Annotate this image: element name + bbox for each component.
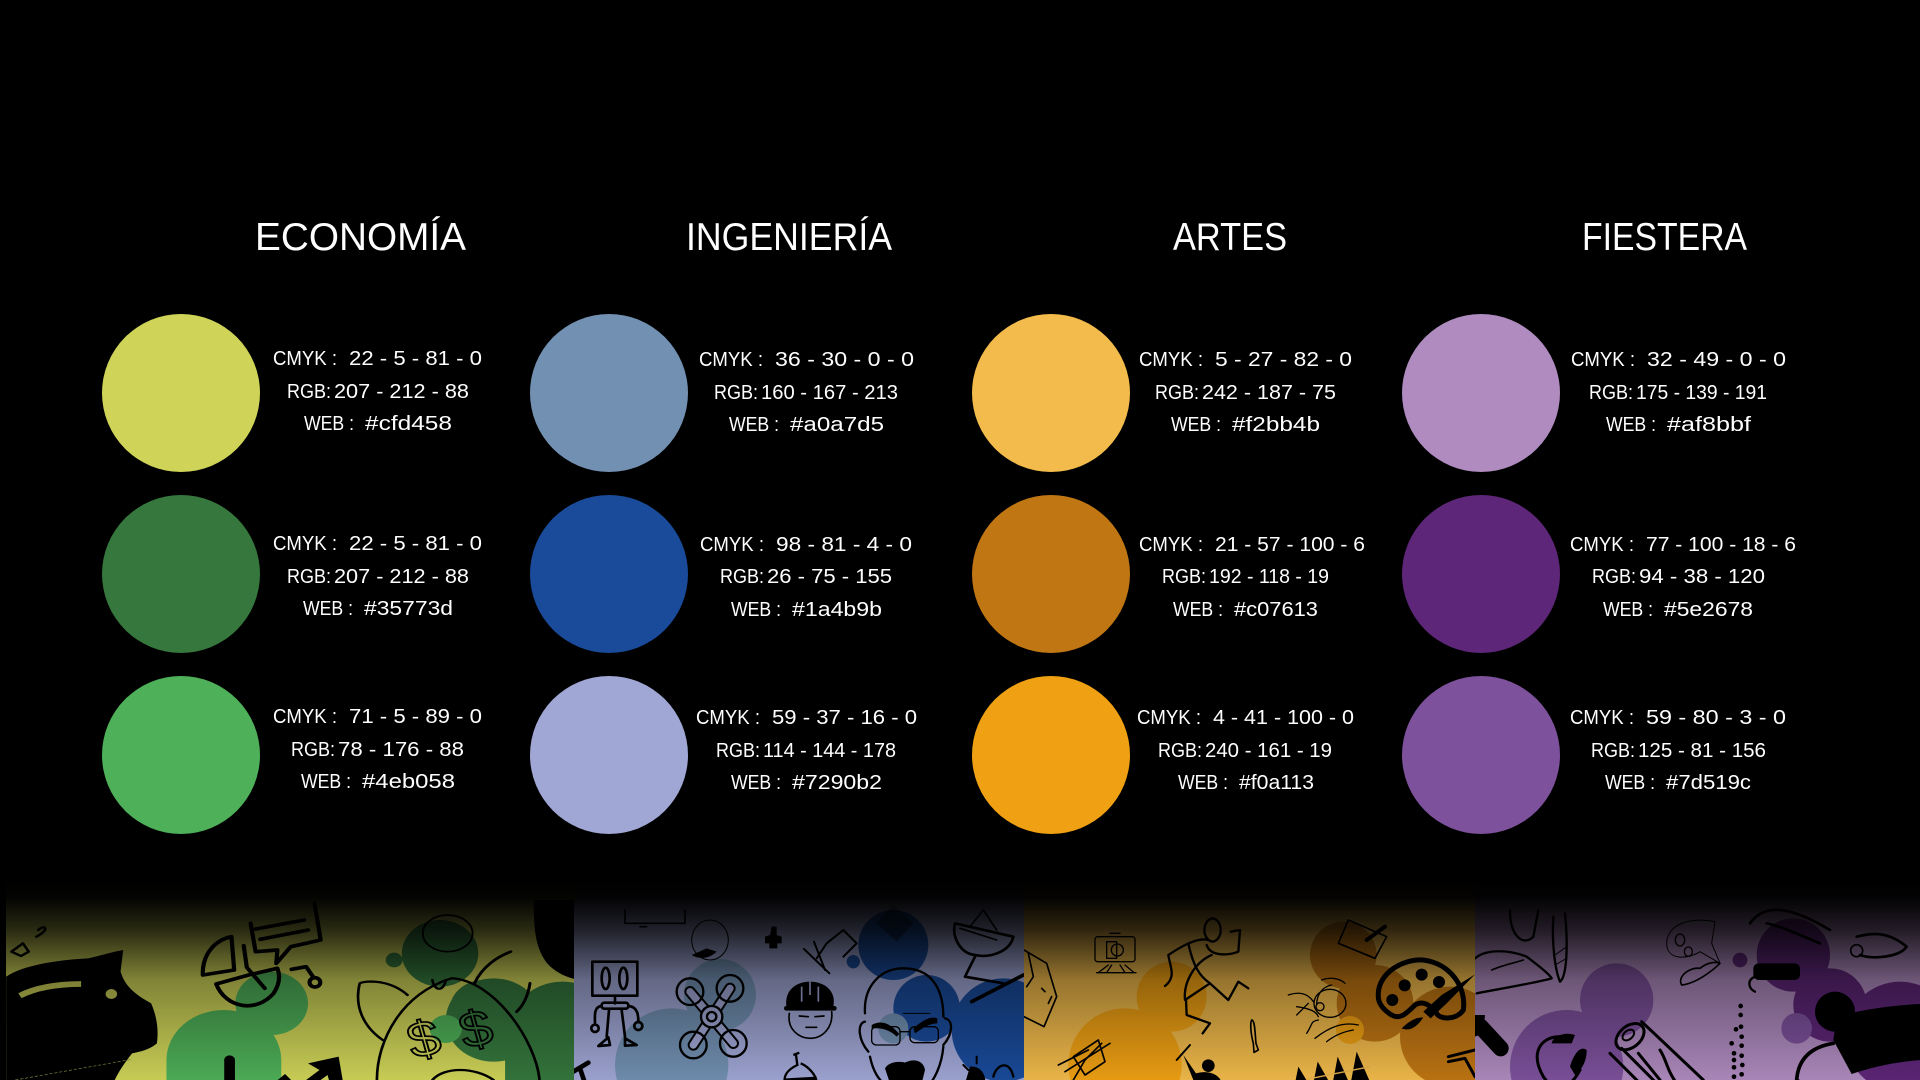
swatch: #35773d: 22 - 5 - 81 - 0 <box>349 532 482 555</box>
swatch: #cfd458: 207 - 212 - 88 <box>334 380 469 403</box>
illustration strip: artes <box>1024 900 1475 1080</box>
swatch: #1a4b9b: CMYK : <box>700 533 764 556</box>
illustration strip: economía: $ <box>453 999 499 1060</box>
swatch: #c07613: RGB: <box>1162 565 1206 588</box>
swatch: #cfd458: CMYK : <box>273 347 337 370</box>
swatch: #cfd458: WEB : <box>304 412 354 435</box>
swatch: #7d519c <box>1402 676 1786 834</box>
swatch: #4eb058: RGB: <box>291 738 335 761</box>
swatch: #cfd458: 22 - 5 - 81 - 0 <box>349 347 482 370</box>
swatch: #a0a7d5 <box>530 314 914 472</box>
swatch: #35773d <box>102 495 482 653</box>
swatch: #1a4b9b: #1a4b9b <box>792 598 882 621</box>
swatch: #af8bbf: 175 - 139 - 191 <box>1636 381 1767 404</box>
swatch: #c07613: CMYK : <box>1139 533 1203 556</box>
swatch: #1a4b9b: RGB: <box>720 565 764 588</box>
swatch: #7d519c: WEB : <box>1605 771 1655 794</box>
heading: artes: ARTES <box>1173 216 1287 259</box>
swatch: #1a4b9b: 98 - 81 - 4 - 0 <box>776 533 912 556</box>
swatch: #7d519c: 125 - 81 - 156 <box>1638 739 1766 762</box>
swatch: #7d519c: 59 - 80 - 3 - 0 <box>1646 706 1786 729</box>
panel: artes <box>972 216 1365 834</box>
swatch: #4eb058: #4eb058 <box>362 770 455 793</box>
swatch: #cfd458: #cfd458 <box>365 412 452 435</box>
swatch: #7d519c: #7d519c <box>1666 771 1751 794</box>
swatch: #cfd458: RGB: <box>287 380 331 403</box>
swatch: #1a4b9b: 26 - 75 - 155 <box>767 565 892 588</box>
swatch: #a0a7d5: 160 - 167 - 213 <box>761 381 898 404</box>
swatch: #4eb058: CMYK : <box>273 705 337 728</box>
swatch: #7d519c: RGB: <box>1591 739 1635 762</box>
swatch: #5e2678 <box>1402 495 1796 653</box>
swatch: #f2bb4b: RGB: <box>1155 381 1199 404</box>
swatch: #5e2678: CMYK : <box>1570 533 1634 556</box>
swatch: #5e2678: RGB: <box>1592 565 1636 588</box>
swatch: #4eb058: 78 - 176 - 88 <box>338 738 464 761</box>
swatch: #35773d: CMYK : <box>273 532 337 555</box>
swatch: #f2bb4b <box>972 314 1352 472</box>
swatch: #f0a113: 240 - 161 - 19 <box>1205 739 1332 762</box>
swatch: #a0a7d5: 36 - 30 - 0 - 0 <box>775 348 914 371</box>
heading: economía: ECONOMÍA <box>255 216 466 259</box>
swatch: #c07613: WEB : <box>1173 598 1223 621</box>
illustration strip: economía: $ <box>401 1009 447 1070</box>
swatch: #af8bbf: #af8bbf <box>1667 413 1751 436</box>
illustration strip: economía <box>6 901 574 1080</box>
swatch: #f0a113: #f0a113 <box>1239 771 1314 794</box>
swatch: #f0a113: 4 - 41 - 100 - 0 <box>1213 706 1354 729</box>
swatch: #7290b2: 59 - 37 - 16 - 0 <box>772 706 917 729</box>
swatch: #f2bb4b: 242 - 187 - 75 <box>1202 381 1336 404</box>
swatch: #f0a113: RGB: <box>1158 739 1202 762</box>
swatch: #c07613 <box>972 495 1365 653</box>
swatch: #7290b2: CMYK : <box>696 706 760 729</box>
swatch: #35773d: 207 - 212 - 88 <box>334 565 469 588</box>
swatch: #f0a113: WEB : <box>1178 771 1228 794</box>
swatch: #1a4b9b <box>530 495 912 653</box>
swatch: #af8bbf: RGB: <box>1589 381 1633 404</box>
swatch: #5e2678: WEB : <box>1603 598 1653 621</box>
swatch: #c07613: 192 - 118 - 19 <box>1209 565 1329 588</box>
swatch: #af8bbf: WEB : <box>1606 413 1656 436</box>
swatch: #7d519c: CMYK : <box>1570 706 1634 729</box>
swatch: #c07613: #c07613 <box>1234 598 1318 621</box>
swatch: #4eb058: WEB : <box>301 770 351 793</box>
swatch: #f2bb4b: 5 - 27 - 82 - 0 <box>1215 348 1352 371</box>
swatch: #35773d: #35773d <box>364 597 453 620</box>
swatch: #7290b2: #7290b2 <box>792 771 882 794</box>
illustration strip: fiestera <box>1475 902 1920 1080</box>
swatch: #f2bb4b: WEB : <box>1171 413 1221 436</box>
swatch: #5e2678: 77 - 100 - 18 - 6 <box>1646 533 1796 556</box>
swatch: #f0a113 <box>972 676 1354 834</box>
swatch: #a0a7d5: WEB : <box>729 413 779 436</box>
swatch: #af8bbf: 32 - 49 - 0 - 0 <box>1647 348 1786 371</box>
panel: economía <box>102 216 482 834</box>
swatch: #7290b2: WEB : <box>731 771 781 794</box>
heading: ingeniería: INGENIERÍA <box>686 216 892 259</box>
swatch: #af8bbf: CMYK : <box>1571 348 1635 371</box>
swatch: #5e2678: 94 - 38 - 120 <box>1639 565 1765 588</box>
swatch: #a0a7d5: CMYK : <box>699 348 763 371</box>
swatch: #c07613: 21 - 57 - 100 - 6 <box>1215 533 1365 556</box>
swatch: #4eb058 <box>102 676 482 834</box>
swatch: #1a4b9b: WEB : <box>731 598 781 621</box>
swatch: #cfd458 <box>102 314 482 472</box>
illustration strip: ingeniería <box>574 901 1024 1080</box>
panel: ingeniería <box>530 216 917 834</box>
swatch: #5e2678: #5e2678 <box>1664 598 1753 621</box>
panel: fiestera <box>1402 216 1796 834</box>
swatch: #4eb058: 71 - 5 - 89 - 0 <box>349 705 482 728</box>
swatch: #f0a113: CMYK : <box>1137 706 1201 729</box>
swatch: #a0a7d5: #a0a7d5 <box>790 413 884 436</box>
swatch: #35773d: WEB : <box>303 597 353 620</box>
swatch: #af8bbf <box>1402 314 1786 472</box>
black fade over illustration strip <box>0 880 1920 1080</box>
swatch: #f2bb4b: #f2bb4b <box>1232 413 1320 436</box>
swatch: #7290b2 <box>530 676 917 834</box>
heading: fiestera: FIESTERA <box>1582 216 1747 259</box>
swatch: #35773d: RGB: <box>287 565 331 588</box>
swatch: #7290b2: 114 - 144 - 178 <box>763 739 896 762</box>
swatch: #f2bb4b: CMYK : <box>1139 348 1203 371</box>
swatch: #7290b2: RGB: <box>716 739 760 762</box>
swatch: #a0a7d5: RGB: <box>714 381 758 404</box>
